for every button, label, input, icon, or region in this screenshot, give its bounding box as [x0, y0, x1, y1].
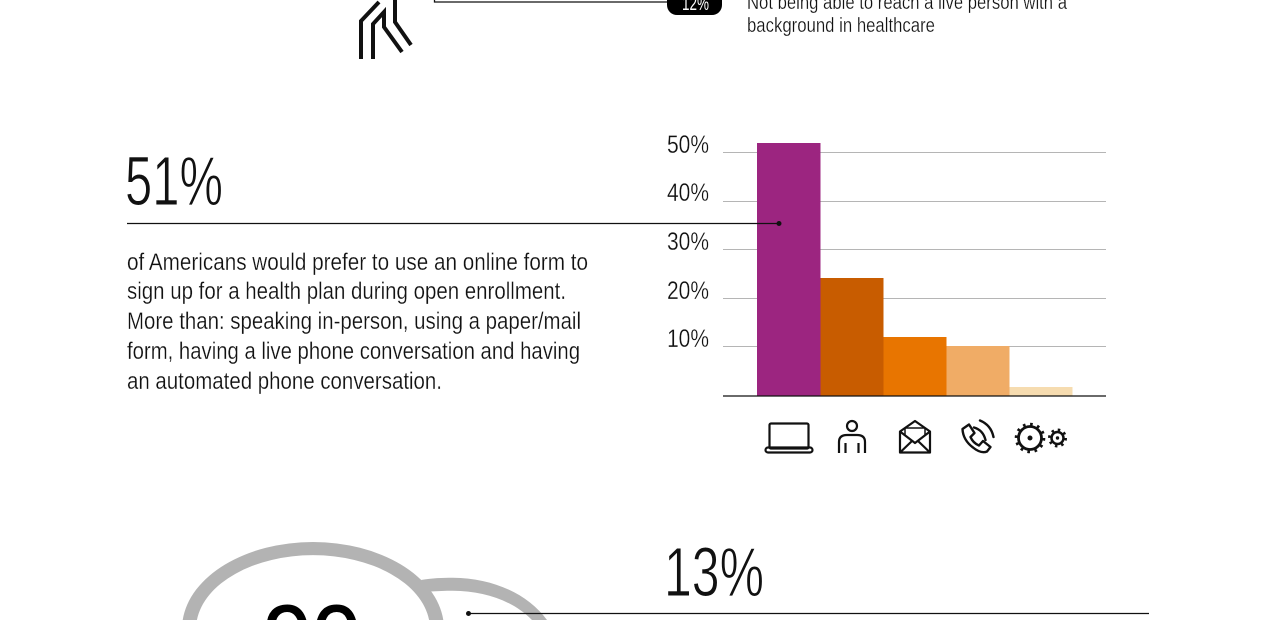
bar: paper/mail [884, 337, 946, 396]
pointer line under 13% [466, 611, 1149, 616]
y axis labels: 50% [667, 131, 709, 159]
icon: person [839, 421, 865, 453]
icon: human legs [361, 0, 411, 59]
y axis labels: 10% [667, 325, 709, 353]
icon: phone call [962, 420, 994, 452]
icon: laptop [766, 424, 812, 452]
pill: 12% [667, 0, 722, 15]
heading: 13%: 13% [664, 533, 764, 611]
y axis labels: 20% [667, 277, 709, 305]
text block: online form preference: More than: speaking in-person, using a paper/mail [127, 308, 581, 335]
icon: gears [1016, 424, 1066, 452]
text block: online form preference: form, having a live phone conversation and having [127, 338, 580, 365]
bar: live phone [946, 346, 1010, 396]
text block: online form preference: an automated phone conversation. [127, 368, 442, 395]
text block: top reason [747, 0, 1068, 37]
text block: online form preference [127, 249, 588, 395]
y axis labels: 40% [667, 179, 709, 207]
bar: automated phone [1010, 387, 1072, 396]
text block: online form preference: of Americans would prefer to use an online form to [127, 249, 588, 276]
text block: online form preference: sign up for a health plan during open enrollment. [127, 278, 566, 305]
y axis labels [667, 131, 709, 353]
heading: 51%: 51% [125, 142, 223, 220]
bar: in-person [820, 278, 884, 396]
pointer line from 51% to bar [127, 221, 782, 226]
bar chart: preferred enrollment method [667, 131, 1106, 396]
icon: open envelope [900, 421, 930, 452]
connector line to 12% pill [434, 0, 668, 2]
bar: online form [757, 143, 820, 396]
text block: top reason: background in healthcare [747, 15, 935, 37]
speech bubbles outline [183, 542, 547, 620]
y axis labels: 30% [667, 228, 709, 256]
